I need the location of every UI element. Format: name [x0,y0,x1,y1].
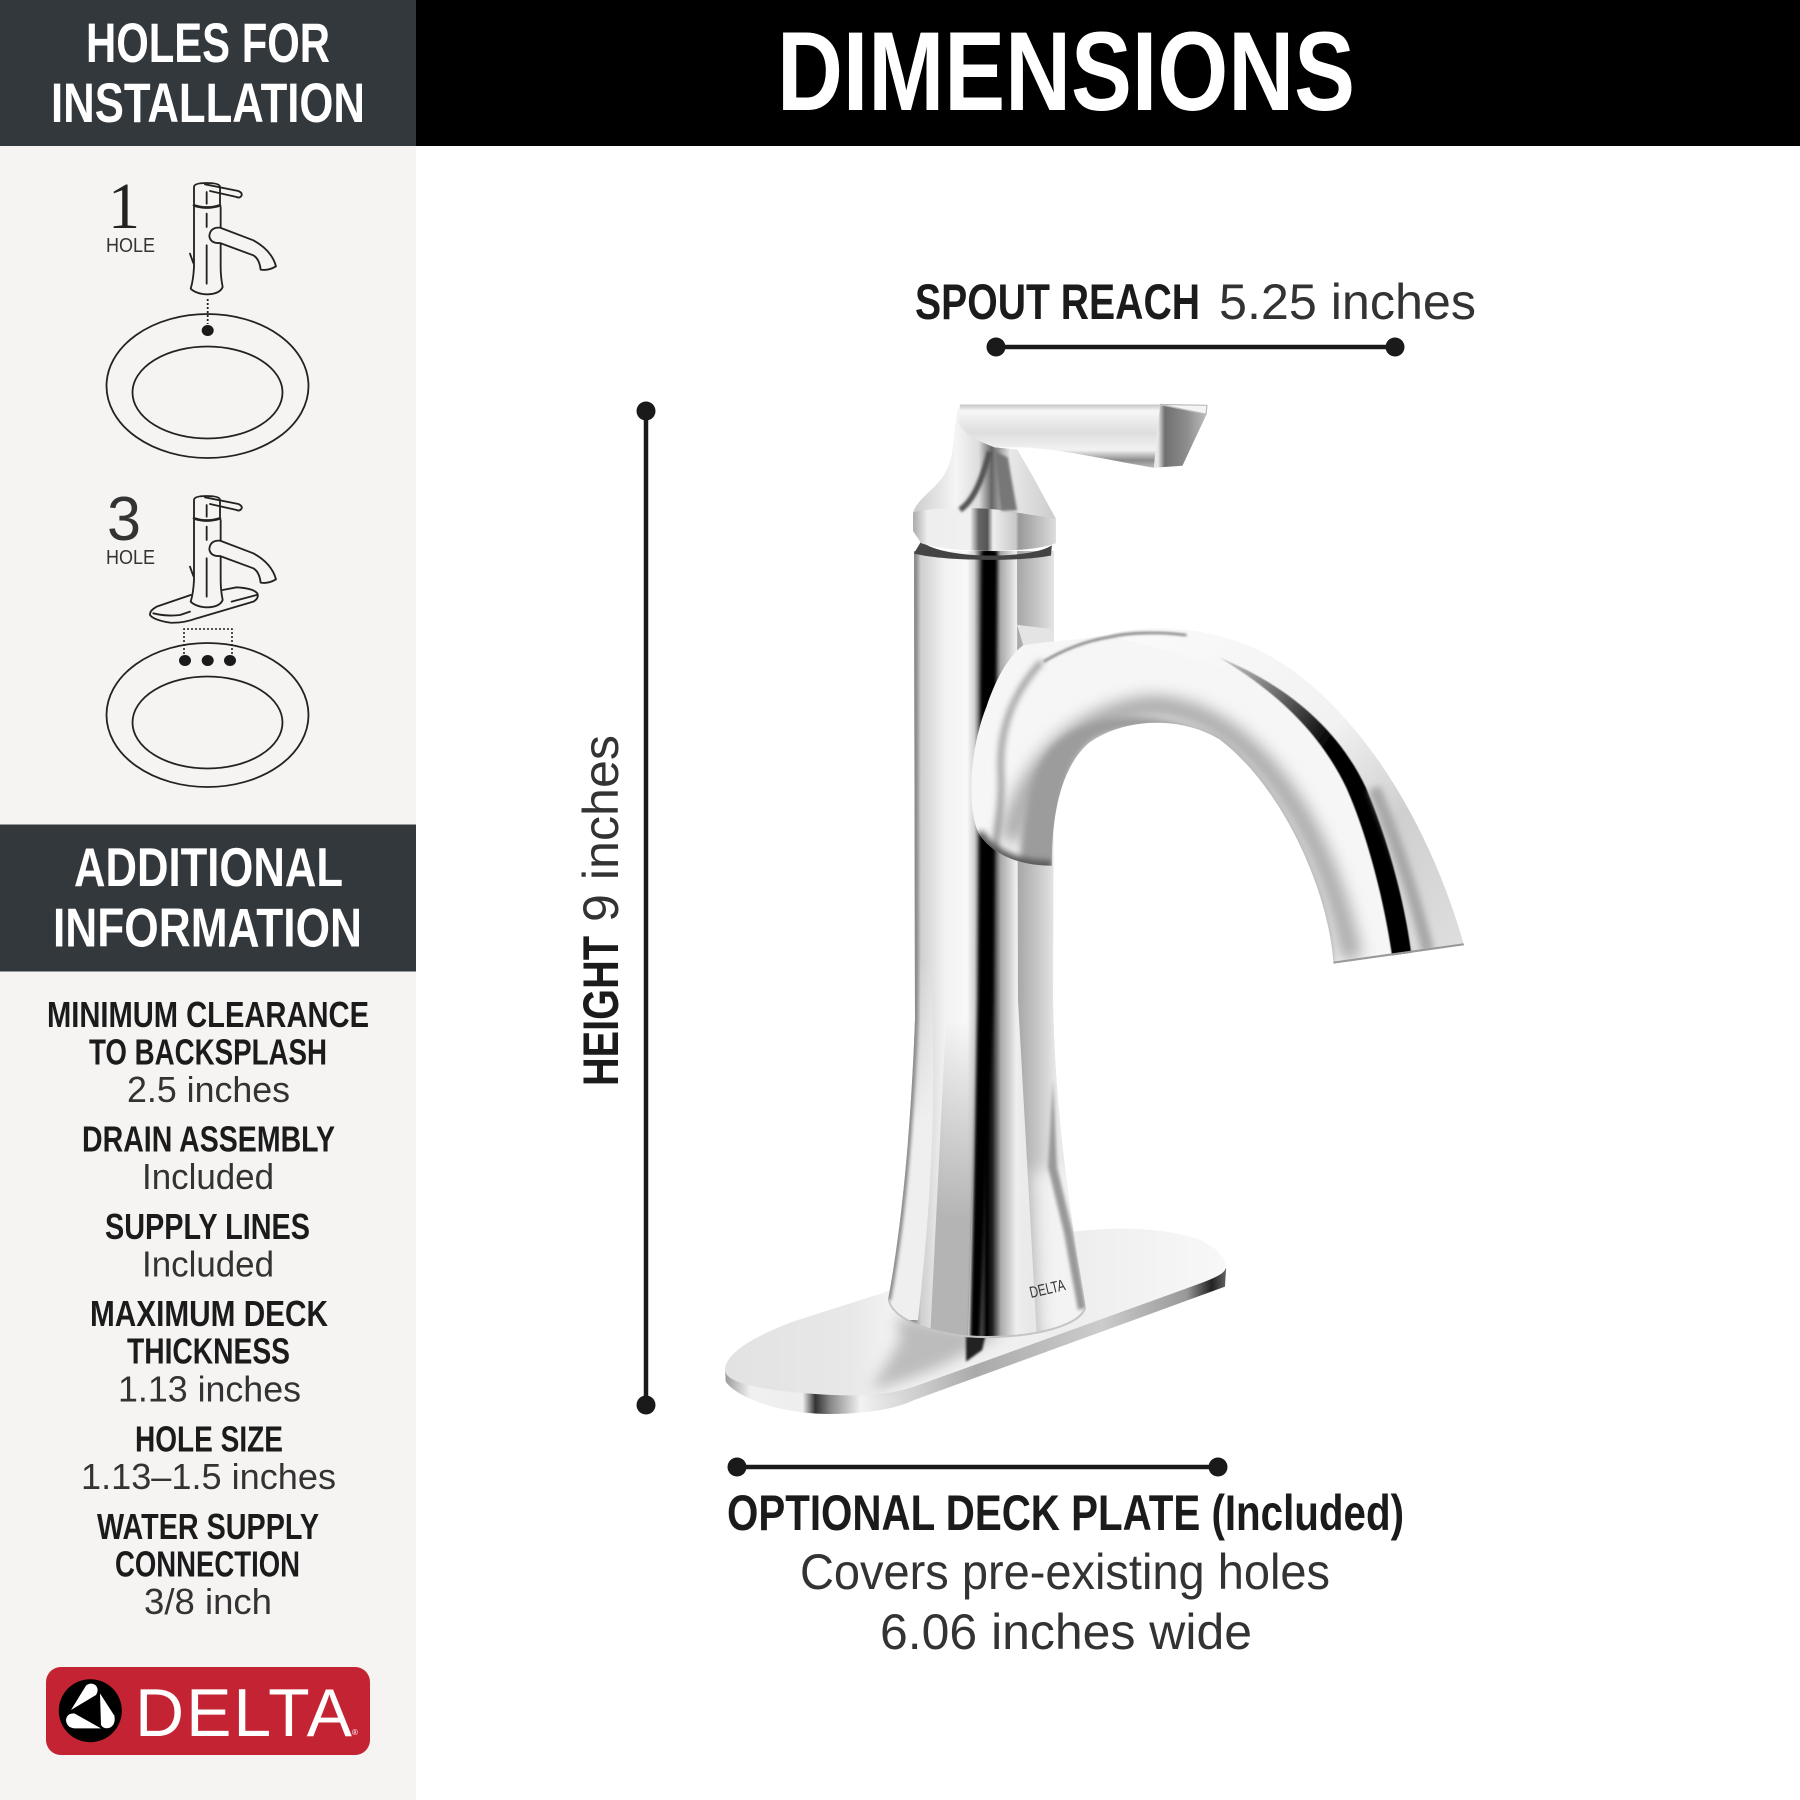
text: minimum clearance: 2.5 inches [127,1069,290,1110]
faucet: deck plate [725,1229,1226,1414]
text: supply lines [105,1206,310,1284]
text: optional deck plate: 6.06 inches wide [880,1604,1252,1660]
label: height: 9 inches [573,735,629,922]
heading: additional information: INFORMATION [53,896,362,958]
faucet: brand mark: DELTA [1028,1277,1067,1302]
dimension line: deck plate [728,1458,1228,1476]
logo: delta: ® [352,1728,358,1737]
label: 3 hole [106,485,155,569]
icon: one hole faucet [190,183,276,294]
text: water supply connection [97,1506,319,1622]
dimension line: spout reach [986,338,1404,356]
logo: delta [46,1667,370,1755]
title banner: dimensions [416,0,1800,146]
text: maximum deck thickness: MAXIMUM DECK [90,1293,328,1334]
text: water supply connection: 3/8 inch [144,1581,272,1622]
text: maximum deck thickness: THICKNESS [127,1330,290,1372]
heading: additional information: ADDITIONAL [74,836,343,898]
faucet: handle [913,404,1207,560]
text: hole size: 1.13–1.5 inches [81,1456,336,1497]
label: 1 hole [106,170,155,257]
text: minimum clearance: MINIMUM CLEARANCE [47,994,369,1035]
label: spout reach: SPOUT REACH [915,274,1200,330]
text: hole size [81,1418,336,1497]
label: 1 hole: 1 [108,170,140,243]
heading: additional information [0,824,416,972]
heading: holes for installation: INSTALLATION [51,71,365,134]
title banner: dimensions: DIMENSIONS [777,9,1355,134]
heading: holes for installation: HOLES FOR [86,11,330,74]
icon: one hole sink [106,299,308,458]
text: optional deck plate: OPTIONAL DECK PLATE (Included) [727,1485,1404,1541]
logo: delta: DELTA [135,1675,353,1751]
label: 3 hole: HOLE [106,547,155,569]
text: water supply connection: CONNECTION [115,1544,300,1584]
label: height [573,735,629,1086]
text: hole size: HOLE SIZE [135,1418,283,1460]
text: optional deck plate: Covers pre-existing holes [800,1544,1330,1600]
text: supply lines: Included [142,1244,274,1284]
text: drain assembly: DRAIN ASSEMBLY [82,1118,335,1160]
icon: three hole faucet with plate [150,496,276,623]
text: maximum deck thickness: 1.13 inches [118,1368,301,1410]
icon: three hole sink [106,629,308,787]
panel: left sidebar [0,0,416,1800]
text: optional deck plate [727,1485,1404,1660]
text: supply lines: SUPPLY LINES [105,1206,310,1247]
label: 1 hole: HOLE [106,235,155,257]
text: drain assembly [82,1118,335,1197]
text: drain assembly: Included [142,1156,274,1197]
text: minimum clearance [47,994,369,1110]
faucet: body column [888,551,1086,1338]
heading: holes for installation [0,0,416,146]
faucet: spout [971,625,1464,964]
text: minimum clearance: TO BACKSPLASH [89,1032,327,1072]
label: spout reach [915,274,1476,330]
dimension line: height [636,402,656,1414]
text: maximum deck thickness [90,1293,328,1410]
label: spout reach: 5.25 inches [1219,274,1476,330]
label: 3 hole: 3 [107,485,141,554]
text: water supply connection: WATER SUPPLY [97,1506,319,1547]
label: height: HEIGHT [573,936,629,1086]
